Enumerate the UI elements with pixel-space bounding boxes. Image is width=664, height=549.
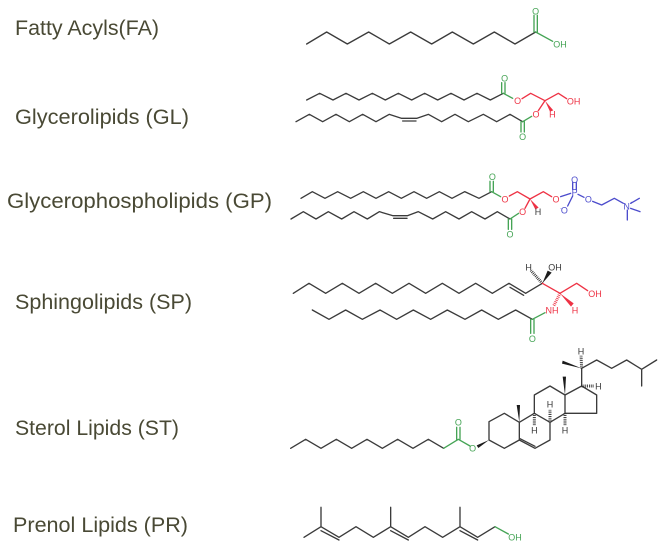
molecule: glycerolipid structure <box>296 73 580 142</box>
molecule: sterol ring system: H <box>578 347 584 357</box>
molecule: glycerophospholipid structure: O <box>561 205 568 215</box>
molecule: glycerophospholipid structure: P <box>572 187 578 197</box>
molecule: prenol lipid structure: OH <box>508 533 522 543</box>
heading: Sterol Lipids: Sterol Lipids (ST) <box>15 416 179 440</box>
molecule: glycerophospholipid structure: O <box>571 175 578 185</box>
molecule: glycerophospholipid structure: N <box>623 201 630 211</box>
molecule: sphingolipid structure: OH <box>548 262 562 272</box>
molecule: glycerophospholipid structure: O <box>506 229 513 239</box>
molecule: glycerophospholipid structure: H <box>535 207 541 217</box>
molecule: sterol ring system: H <box>595 381 602 391</box>
molecule: fatty acyl structure <box>307 6 567 50</box>
molecule: sphingolipid structure: H <box>525 262 532 272</box>
molecule: glycerolipid structure: O <box>501 73 508 83</box>
heading: Fatty Acyls: Fatty Acyls(FA) <box>15 16 159 40</box>
molecule: sterol ring system: H <box>547 400 553 410</box>
molecule: glycerophospholipid structure: - <box>560 205 562 211</box>
molecule: glycerolipid structure: O <box>519 132 526 142</box>
molecule: sphingolipid structure: NH <box>546 305 558 315</box>
molecule: glycerolipid structure: O <box>532 110 539 120</box>
molecule: sphingolipid structure: H <box>572 305 578 315</box>
molecule: glycerolipid structure: O <box>514 96 521 106</box>
molecule: glycerolipid structure: OH <box>567 96 580 106</box>
molecule: sterol lipid acyl chain: O <box>455 418 462 428</box>
heading: Glycerophospholipids: Glycerophospholipids (GP) <box>7 189 272 213</box>
molecule: glycerolipid structure: H <box>549 109 556 119</box>
molecule: glycerophospholipid structure: + <box>630 201 633 207</box>
molecule: glycerophospholipid structure: O <box>489 172 496 182</box>
molecule: sterol lipid acyl chain <box>291 418 470 448</box>
heading: Sphingolipids: Sphingolipids (SP) <box>15 290 192 314</box>
heading: Glycerolipids: Glycerolipids (GL) <box>15 105 189 129</box>
molecule: sterol ring system: O <box>469 444 476 454</box>
molecule: glycerophospholipid structure <box>291 172 640 239</box>
molecule: sterol ring system <box>469 347 657 454</box>
molecule: sphingolipid structure <box>293 262 602 344</box>
molecule: prenol lipid structure <box>304 507 522 543</box>
molecule: glycerophospholipid structure: O <box>585 194 592 204</box>
molecule: glycerophospholipid structure: O <box>552 194 559 204</box>
molecule: glycerophospholipid structure: O <box>519 207 526 217</box>
molecule: fatty acyl structure: O <box>532 6 539 16</box>
molecule: fatty acyl structure: OH <box>553 40 567 50</box>
molecule: sterol ring system: H <box>562 425 568 435</box>
molecule: sphingolipid structure: OH <box>588 289 602 299</box>
molecule: glycerophospholipid structure: O <box>501 194 508 204</box>
heading: Prenol Lipids: Prenol Lipids (PR) <box>13 513 188 537</box>
molecule: sterol ring system: H <box>531 425 538 435</box>
molecule: sphingolipid structure: O <box>529 334 536 344</box>
